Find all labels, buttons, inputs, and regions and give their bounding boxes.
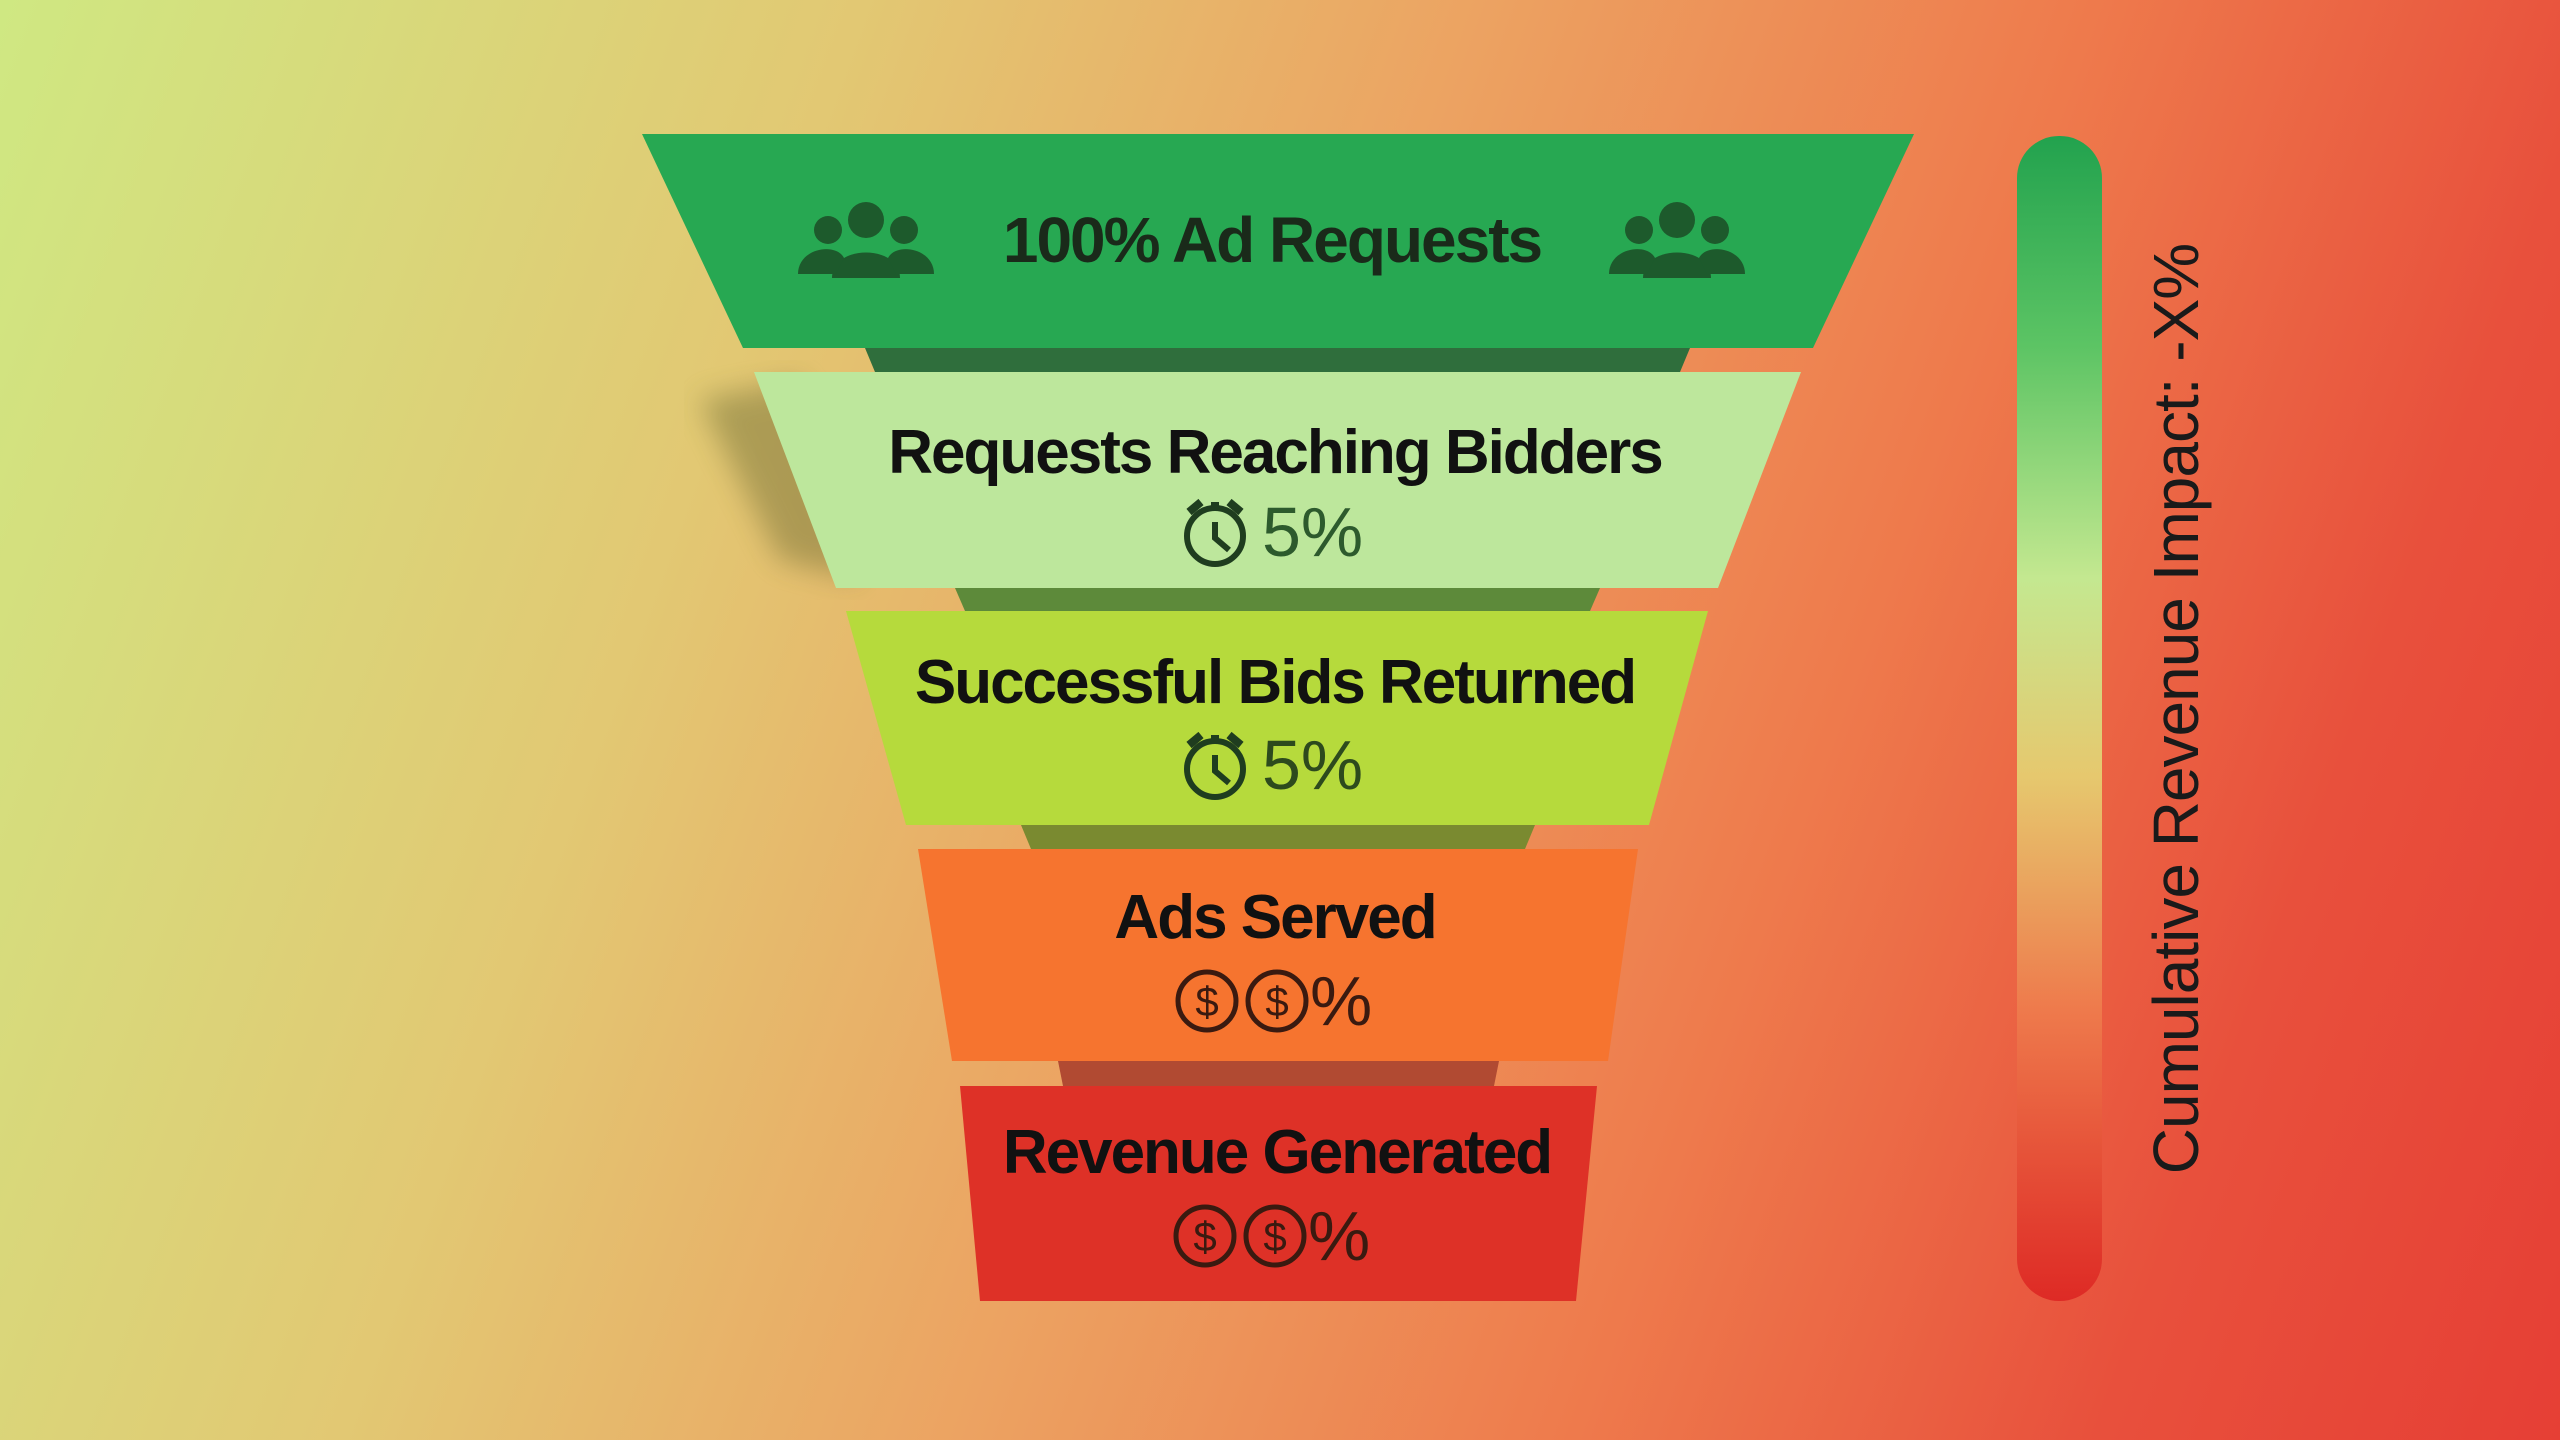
icon: clock [1187, 502, 1243, 564]
icon: people left [798, 202, 934, 278]
funnel [642, 134, 1914, 1301]
band 1: ad requests [642, 134, 1914, 372]
icon: clock [1187, 735, 1243, 797]
band 2: requests reaching bidders [754, 372, 1801, 611]
icon: coins: % [1310, 962, 1372, 1040]
band 3: successful bids: Successful Bids Returned [915, 648, 1635, 717]
icon: coins: $ [1195, 978, 1219, 1025]
band 3: successful bids: 5% [1262, 726, 1363, 804]
icon: people right [1609, 202, 1745, 278]
band 5: revenue generated: Revenue Generated [1003, 1118, 1551, 1187]
icon: coins: % [1308, 1197, 1370, 1275]
band 2: requests reaching bidders: 5% [1262, 493, 1363, 571]
gradient bar [2017, 136, 2102, 1301]
icon: coins: $ [1193, 1213, 1217, 1260]
icon: coins: $ [1265, 978, 1289, 1025]
shadow [700, 380, 860, 580]
band 3: successful bids [846, 611, 1708, 849]
band 2: requests reaching bidders: Requests Reaching Bidders [888, 418, 1662, 487]
vertical label: Cumulative Revenue Impact: -X% [2140, 244, 2212, 1174]
icon: coins: $ [1263, 1213, 1287, 1260]
band 4: ads served [918, 849, 1638, 1086]
icon: coins [1178, 962, 1372, 1040]
band 1: ad requests: 100% Ad Requests [1003, 204, 1541, 276]
icon: coins [1176, 1197, 1370, 1275]
band 4: ads served: Ads Served [1114, 883, 1436, 952]
band 5: revenue generated [960, 1086, 1597, 1301]
